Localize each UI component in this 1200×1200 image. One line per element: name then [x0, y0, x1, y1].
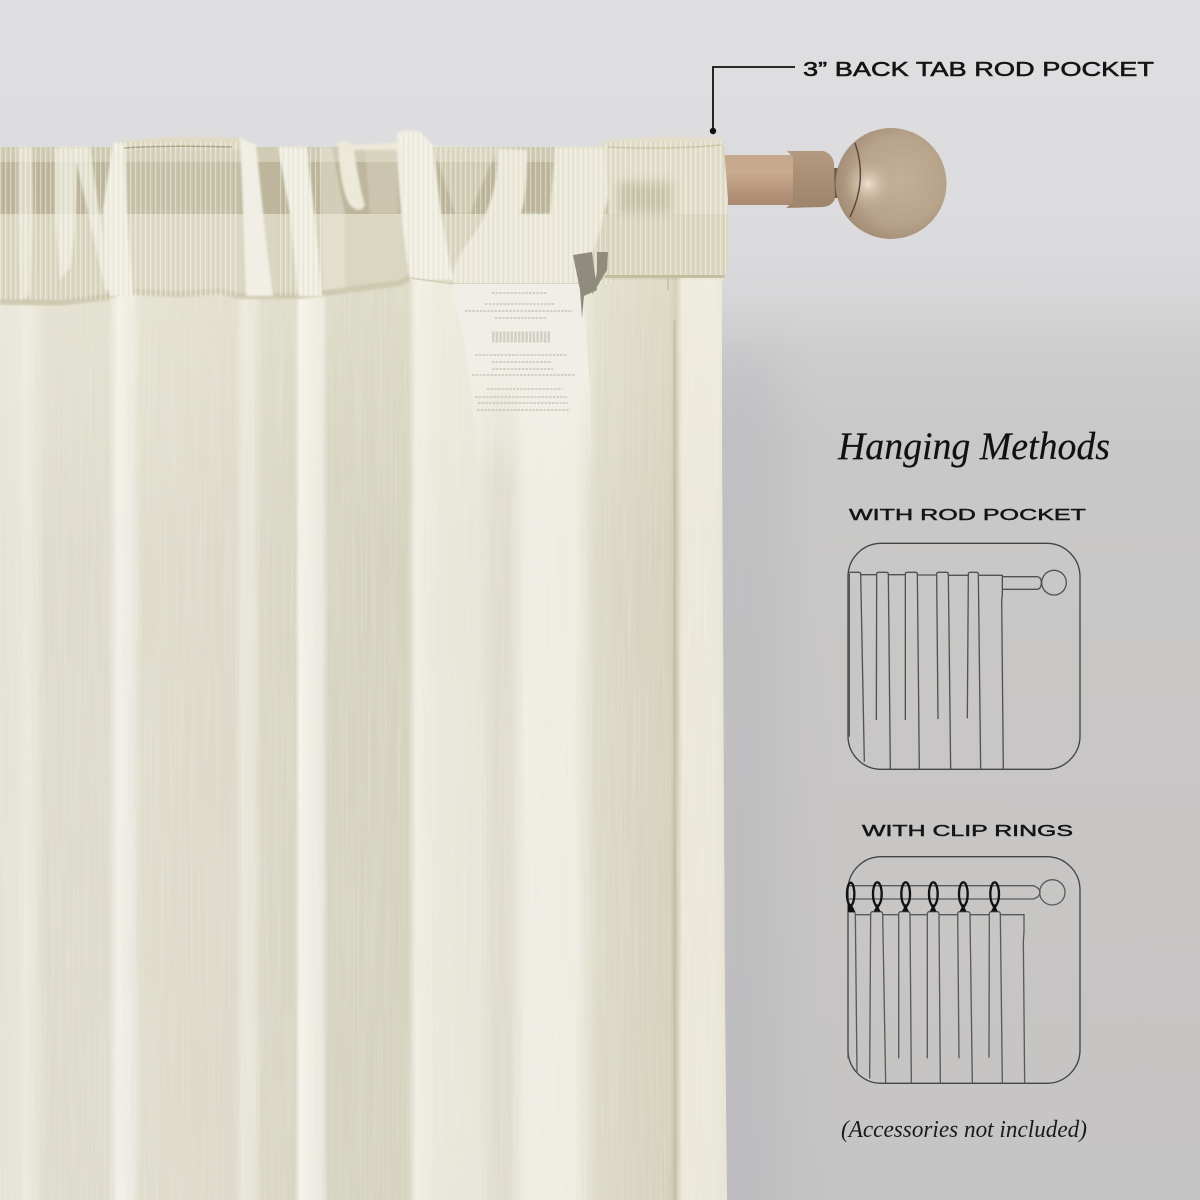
heading: hanging methods: Hanging Methods	[837, 425, 1110, 468]
gathered fabric folds	[0, 131, 730, 300]
footnote: accessories not included: (Accessories not included)	[841, 1116, 1087, 1143]
rod pocket band	[0, 147, 730, 303]
label: with clip rings: WITH CLIP RINGS	[862, 823, 1073, 840]
callout label: 3” BACK TAB ROD POCKET	[803, 58, 1155, 81]
sewn care label	[453, 284, 590, 440]
grey label tag	[573, 252, 608, 318]
icon: clip rings diagram	[847, 857, 1080, 1083]
curtain rod with ball finial	[720, 128, 946, 239]
icon: rod pocket diagram	[848, 543, 1080, 769]
callout leader line	[710, 67, 795, 134]
sheer curtain panel	[0, 131, 730, 1200]
label: with rod pocket: WITH ROD POCKET	[849, 507, 1086, 524]
